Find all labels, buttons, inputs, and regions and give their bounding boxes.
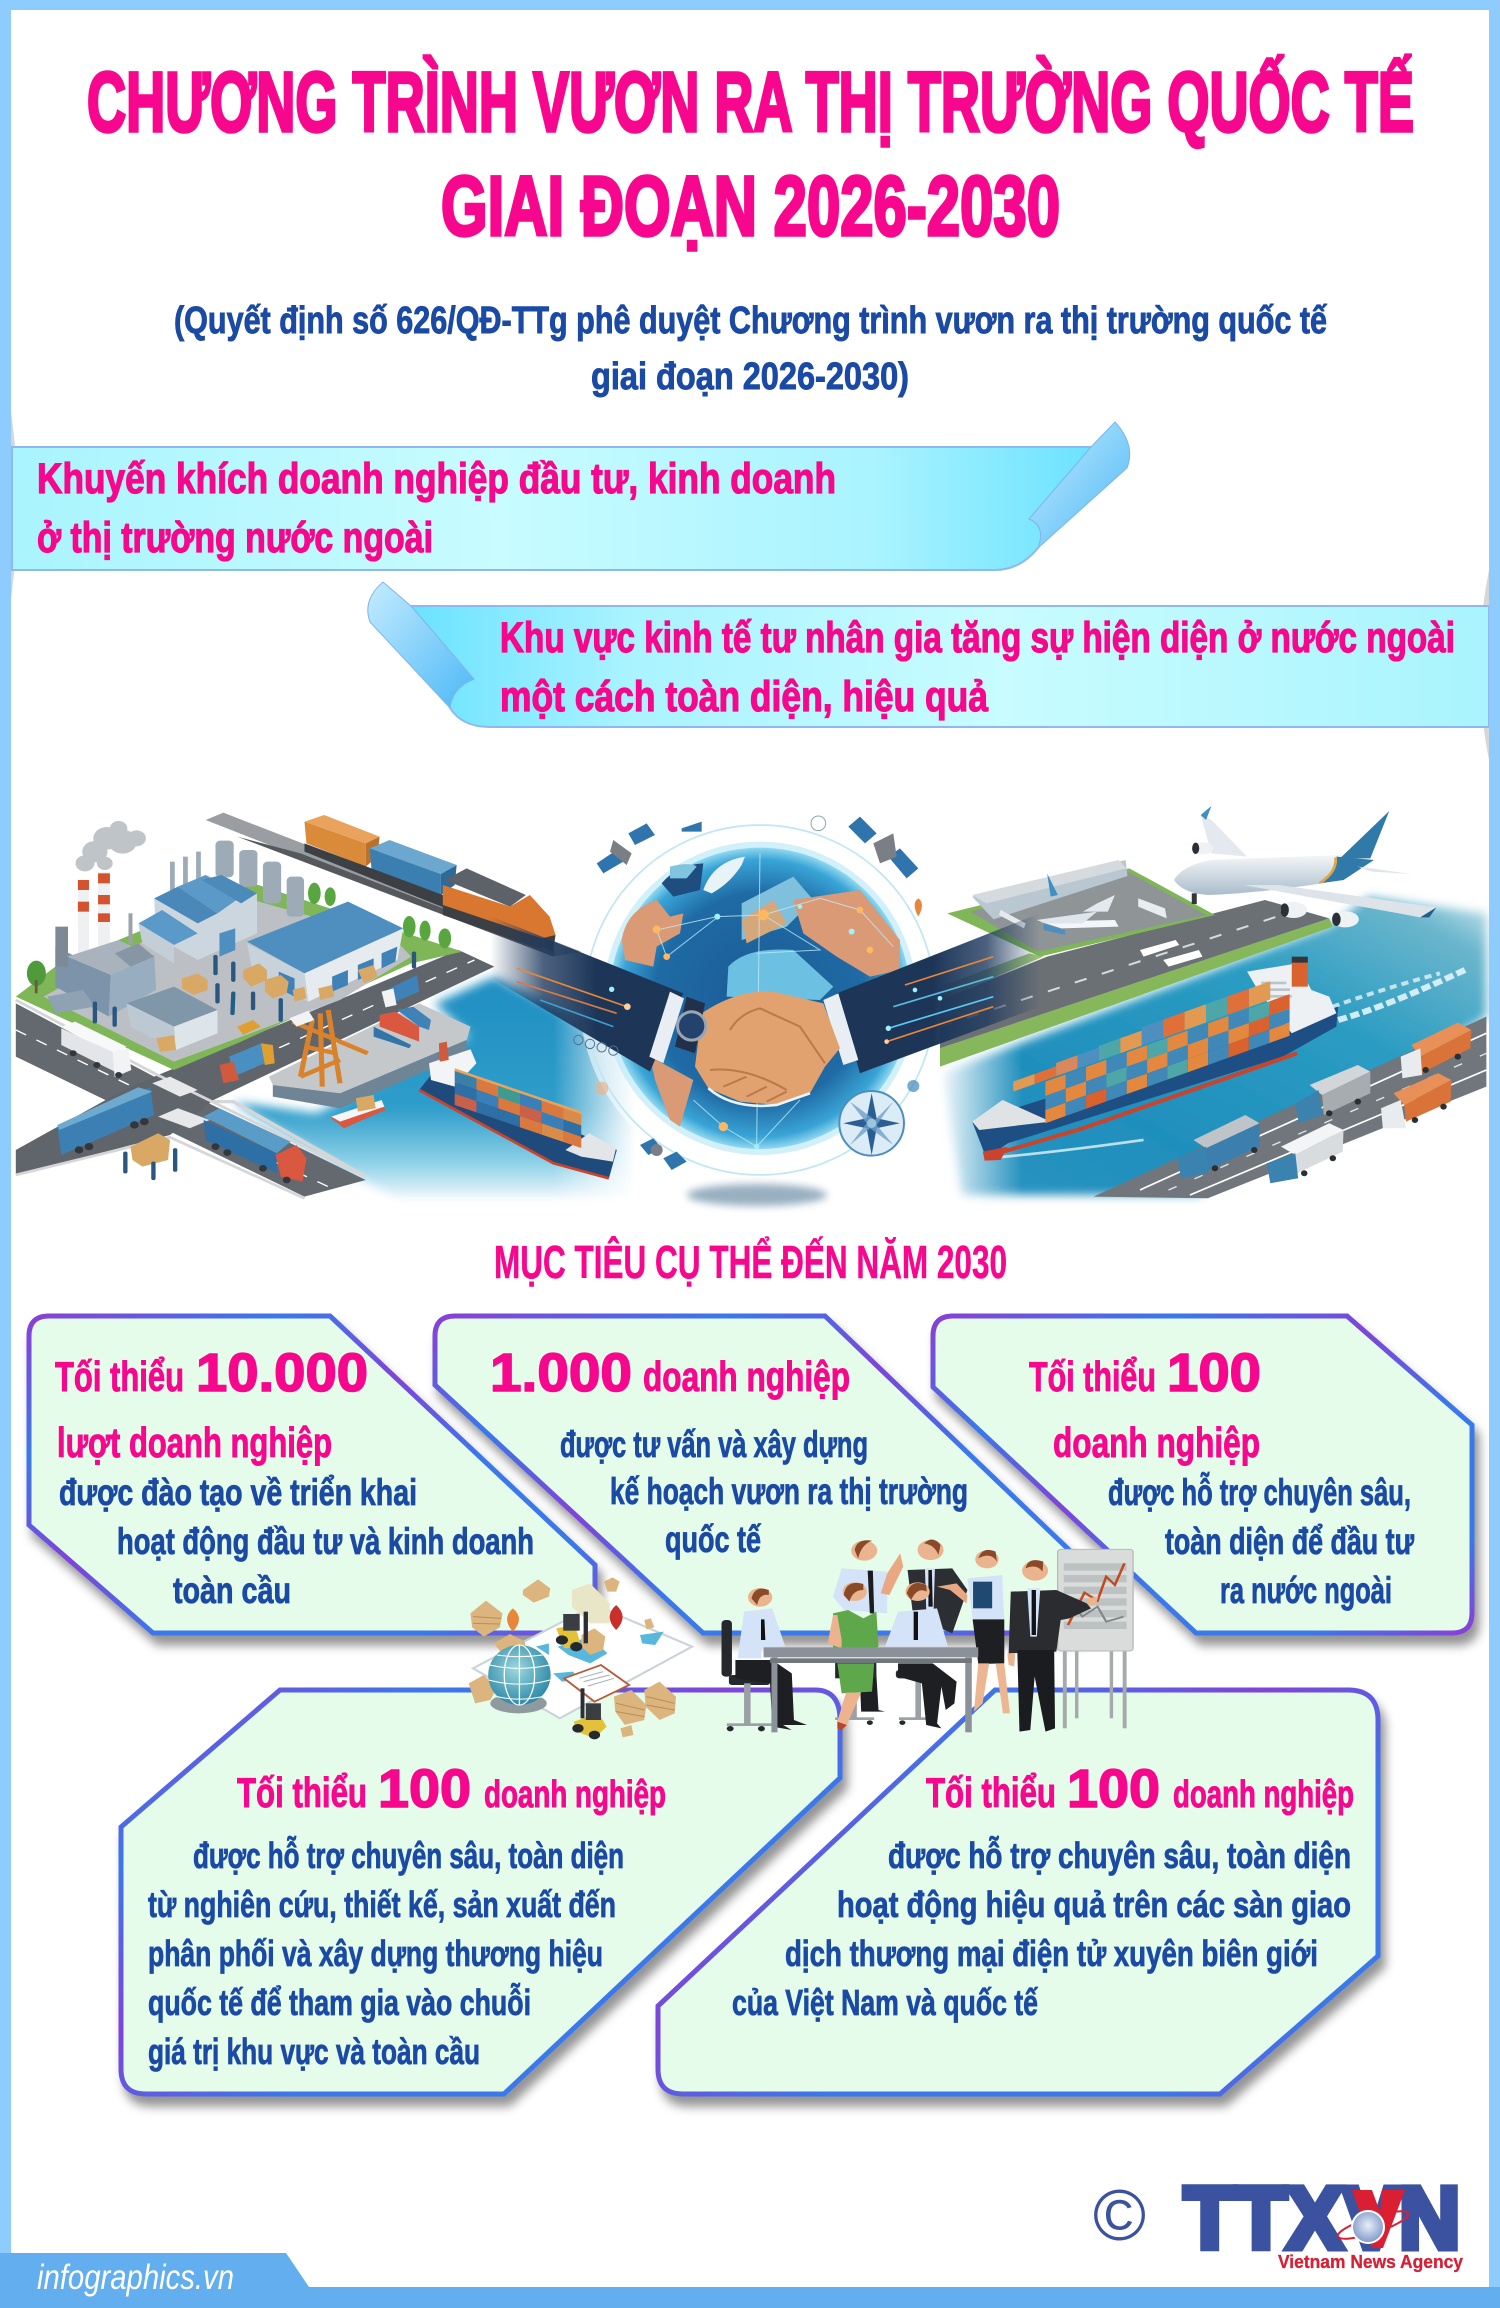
workers: [95, 953, 414, 1178]
dock: [269, 1003, 471, 1093]
flipchart: [1058, 1549, 1133, 1728]
panel: 1.000 enterprises: [435, 1316, 1090, 1633]
panel: 100 enterprises, value chain: [121, 1690, 840, 2094]
seated man center: [885, 1582, 957, 1728]
forklifts: [556, 1612, 607, 1739]
crane: [293, 1010, 368, 1087]
panel text: dịch thương mại điện tử xuyên biên giới: [785, 1933, 1318, 1974]
factory block: [55, 947, 111, 1017]
containers back row: [1013, 981, 1270, 1092]
panel text: từ nghiên cứu, thiết kế, sản xuất đến: [148, 1884, 616, 1925]
seated woman: [828, 1582, 879, 1730]
globe ground shadow: [687, 1184, 827, 1206]
left ship: [419, 1070, 617, 1178]
subtitle: [174, 300, 1328, 398]
factory hall: [154, 875, 257, 960]
panel text: quốc tế: [665, 1519, 761, 1560]
panel heading: doanh nghiệp: [484, 1774, 666, 1816]
smokestacks: [78, 872, 110, 960]
cargo boxes: [130, 963, 378, 1167]
blue trailers: [57, 1087, 154, 1155]
cuffs: [649, 992, 684, 1063]
panel text: được tư vấn và xây dựng: [560, 1424, 868, 1465]
wristwatch: [675, 997, 705, 1053]
containers front row: [1045, 994, 1290, 1123]
panel text: [732, 1835, 1351, 2023]
arm circuit lines: [517, 957, 993, 1042]
globe: [483, 816, 1040, 1180]
panel text: toàn cầu: [173, 1570, 291, 1611]
small building: [127, 987, 217, 1027]
meeting table: [764, 1647, 978, 1732]
globe: [490, 1693, 547, 1713]
icon: logistics map: [469, 1577, 692, 1739]
apron: [947, 868, 1215, 957]
panel heading: 10.000: [196, 1343, 368, 1403]
section heading: MỤC TIÊU CỤ THỂ ĐẾN NĂM 2030: [494, 1236, 1007, 1288]
train: [304, 815, 380, 843]
banner: encourage enterprises: ở thị trường nước ngoài: [37, 514, 433, 562]
network nodes: [657, 853, 893, 1147]
panel text: hoạt động hiệu quả trên các sàn giao: [837, 1884, 1351, 1925]
left arm: [483, 913, 683, 1072]
logo: TTXVN: Vietnam News Agency: [1278, 2252, 1463, 2272]
panel text: toàn diện để đầu tư: [1165, 1521, 1414, 1562]
scene: factory, train and port: [16, 813, 641, 1198]
panel heading: doanh nghiệp: [1053, 1419, 1260, 1466]
panel text: ra nước ngoài: [1220, 1570, 1392, 1611]
truck road: [1094, 1017, 1486, 1198]
banner: private sector: [368, 570, 1489, 760]
panel text: [59, 1472, 534, 1611]
footer tab: infographics.vn: [0, 2253, 1500, 2308]
panel text: được đào tạo về triển khai: [59, 1472, 417, 1513]
panel heading: doanh nghiệp: [643, 1353, 850, 1400]
panel heading: [55, 1343, 368, 1466]
standing man middle: [908, 1540, 967, 1633]
right side trucks: [1411, 1023, 1471, 1057]
panel heading: [237, 1759, 666, 1819]
logo: copyright: ©: [1093, 2176, 1146, 2256]
panel heading: doanh nghiệp: [1173, 1774, 1354, 1816]
subtitle: giai đoạn 2026-2030): [591, 356, 909, 398]
handshake: [695, 991, 840, 1105]
panel text: [1108, 1472, 1414, 1611]
panel heading: 100: [1067, 1759, 1160, 1819]
panel heading: [1029, 1343, 1261, 1466]
title: GIAI ĐOẠN 2026-2030: [441, 159, 1060, 253]
footer tab: infographics.vn: infographics.vn: [37, 2258, 234, 2297]
boxes: [469, 1577, 676, 1737]
panel text: được hỗ trợ chuyên sâu, toàn diện: [193, 1835, 624, 1876]
panel text: được hỗ trợ chuyên sâu, toàn diện: [888, 1835, 1351, 1876]
panel heading: Tối thiểu: [237, 1769, 367, 1816]
airplane: [1201, 815, 1247, 857]
panel text: phân phối và xây dựng thương hiệu: [148, 1933, 603, 1974]
illustration: global trade handshake: [16, 806, 1486, 1206]
panel heading: lượt doanh nghiệp: [57, 1419, 332, 1466]
title: [87, 55, 1414, 253]
logo: TTXVN: TTXVN: [1184, 2170, 1460, 2267]
panel heading: [490, 1343, 850, 1403]
panel: 100 enterprises, e-commerce: [658, 1690, 1378, 2094]
banner: encourage enterprises: Khuyến khích doanh nghiệp đầu tư, kinh doanh: [37, 455, 836, 503]
panel text: [148, 1835, 624, 2072]
tanks: [170, 841, 304, 917]
wake: [1338, 970, 1465, 1020]
banner: private sector: một cách toàn diện, hiệu quả: [500, 673, 989, 721]
panel heading: [926, 1759, 1354, 1819]
panel heading: Tối thiểu: [926, 1769, 1056, 1816]
right arm: [837, 913, 1040, 1073]
compass: [839, 1091, 904, 1156]
seated man left: [722, 1588, 807, 1731]
scene: airport, container ship and trucks: [940, 806, 1486, 1198]
panel: 10.000 enterprises: [29, 1316, 595, 1633]
panel text: kế hoạch vươn ra thị trường: [610, 1471, 968, 1512]
panel text: giá trị khu vực và toàn cầu: [148, 2031, 480, 2072]
panel text: [560, 1424, 968, 1560]
warehouse: [247, 902, 403, 973]
presenter: [1007, 1560, 1098, 1732]
panel heading: 100: [1167, 1343, 1261, 1403]
panel text: hoạt động đầu tư và kinh doanh: [117, 1521, 534, 1562]
smoke: [76, 821, 146, 871]
satellites: [597, 817, 918, 1170]
panel heading: 1.000: [490, 1343, 632, 1403]
panel heading: 100: [378, 1759, 471, 1819]
standing man left: [833, 1540, 903, 1712]
container ship: [972, 1007, 1338, 1158]
continents: [622, 900, 683, 967]
panel heading: Tối thiểu: [1029, 1353, 1156, 1400]
panel: 100 enterprises, invest abroad: [933, 1316, 1472, 1633]
small trucks: [229, 1043, 265, 1077]
small boat: [331, 1102, 386, 1128]
panel text: của Việt Nam và quốc tế: [732, 1982, 1039, 2023]
panel text: quốc tế để tham gia vào chuỗi: [148, 1982, 531, 2023]
standing woman: [967, 1550, 1010, 1713]
white truck: [61, 1028, 115, 1072]
banner: encourage enterprises: [11, 412, 1130, 600]
panel heading: Tối thiểu: [55, 1353, 184, 1400]
icon: business meeting: [722, 1540, 1133, 1732]
